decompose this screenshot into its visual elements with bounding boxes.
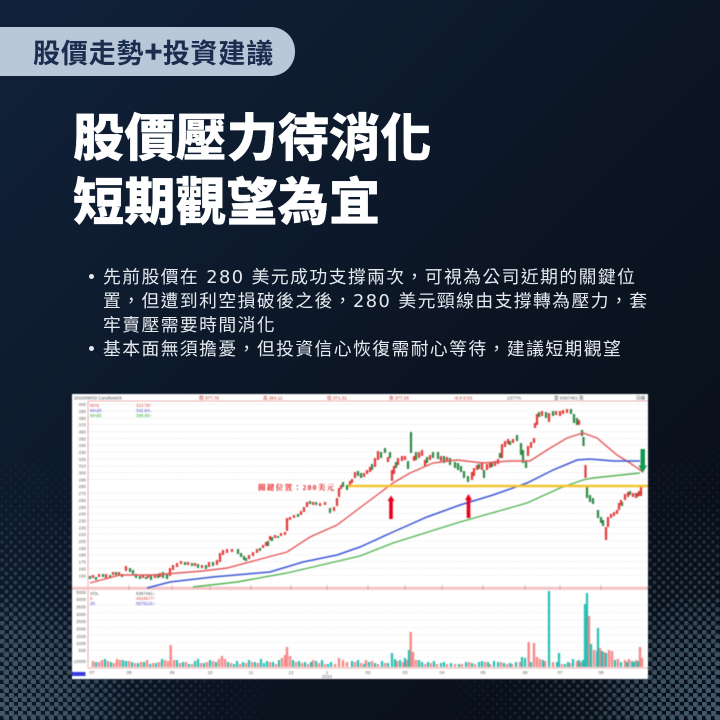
volume bars: teal (96, 591, 638, 667)
price axis labels: 340 (79, 443, 87, 448)
price axis labels: 350 (79, 436, 87, 441)
volume axis labels: 5000 (76, 590, 87, 595)
volume bars: red (93, 616, 642, 667)
time axis labels: 12 (288, 670, 294, 675)
time axis labels: 02 (365, 670, 371, 675)
volume axis labels: 1500 (76, 634, 87, 639)
price axis labels: 220 (79, 525, 87, 530)
MA legend: MA20 (90, 408, 102, 413)
price axis labels: 380 (79, 416, 87, 421)
time axis labels: 11 (249, 670, 254, 675)
blue date tag (72, 672, 86, 676)
bullet text block: 基本面無須擔憂，但投資信心恢復需耐心等待，建議短期觀望 (103, 339, 622, 359)
MA legend (90, 403, 152, 418)
time axis labels: 04 (439, 670, 445, 675)
price axis labels: 180 (79, 553, 87, 558)
category tag: 股價走勢+投資建議: 股價走勢+投資建議 (33, 28, 274, 72)
chart header data row: Candlestick (98, 396, 122, 400)
MA legend: MA60 (90, 413, 102, 418)
price axis labels: 150 (79, 573, 87, 578)
volume axis labels: 1000 (76, 641, 87, 646)
time axis labels: 09 (169, 670, 175, 675)
key level label: 關鍵位置：280美元 (258, 482, 336, 492)
bullet text block (89, 267, 648, 359)
price axis labels: 210 (79, 532, 87, 537)
time axis labels: 03 (402, 670, 408, 675)
volume legend: 6397461↓ (136, 591, 155, 596)
price axis labels: 330 (79, 450, 87, 455)
breakdown arrow (638, 449, 647, 473)
chart header data row: 日線 (636, 394, 646, 402)
price axis labels: 290 (79, 477, 87, 482)
support arrow 2 (465, 494, 472, 518)
volume legend: 5575131↑ (136, 601, 155, 606)
price axis labels: 240 (79, 512, 87, 516)
price axis labels: 250 (79, 505, 87, 510)
chart frame (72, 401, 648, 668)
price axis labels: 190 (79, 546, 87, 551)
chart header data row: 開 377.76 (199, 396, 219, 402)
price axis labels: 270 (79, 491, 87, 496)
volume axis labels: 10000 (74, 659, 87, 664)
time axis labels: 1 (326, 670, 329, 675)
bullet text block: 牢賣壓需要時間消化 (103, 315, 276, 335)
price axis labels: 260 (79, 498, 87, 503)
chart header data row: 1377% (507, 396, 521, 400)
moving average: green line (193, 473, 640, 587)
chart header data row: 量 6397461 張 (554, 394, 584, 402)
time axis labels: 07 (557, 670, 563, 675)
volume axis labels: 2000 (76, 626, 87, 632)
MA legend: 298.85↑ (136, 413, 152, 418)
volume legend: VOL (90, 591, 99, 596)
moving average: red line (90, 433, 643, 583)
price axis labels: 400 (79, 402, 87, 407)
price axis labels: 200 (79, 539, 87, 544)
candlesticks: up days (93, 409, 641, 578)
chart header data row: -8.0 0.03 (454, 396, 473, 400)
panel: stock candlestick chart (72, 394, 648, 679)
price axis labels: 370 (79, 422, 87, 428)
key level line at 280 (348, 485, 648, 487)
time axis labels: 05 (480, 670, 486, 675)
price axis labels: 280 (79, 484, 87, 489)
MA legend: 313.78↑ (136, 403, 152, 408)
volume legend: 20 (90, 601, 95, 606)
time axis labels: 08 (598, 670, 604, 675)
price axis labels: 320 (79, 457, 87, 462)
volume axis labels: 3000 (76, 612, 87, 617)
volume legend: 4626677↑ (136, 596, 155, 601)
title: 短期觀望為宜 (73, 174, 380, 231)
time axis labels (89, 670, 604, 679)
volume axis labels (74, 590, 87, 664)
price axis labels: 310 (79, 464, 87, 469)
price axis labels: 230 (79, 518, 87, 523)
support arrow 1 (388, 496, 394, 519)
title (73, 110, 431, 231)
price axis labels: 170 (79, 560, 87, 564)
title: 股價壓力待消化 (73, 110, 431, 167)
chart header data row: 高 384.11 (263, 394, 283, 402)
volume legend (90, 591, 155, 606)
chart header data row: 低 371.31 (327, 394, 347, 402)
MA legend: MA5 (90, 403, 100, 408)
time axis labels: 07 (89, 670, 95, 675)
volume legend: 5 (90, 596, 93, 601)
price axis labels: 390 (79, 409, 87, 414)
volume axis labels: 3600 (76, 604, 87, 610)
chart header data row (74, 394, 646, 402)
time axis labels: 2024 (322, 674, 333, 679)
volume axis labels: 500 (79, 648, 87, 653)
bullet text block: 置，但遭到利空損破後之後，280 美元頸線由支撐轉為壓力，套 (103, 291, 648, 312)
time axis labels: 06 (522, 670, 528, 675)
MA legend: 342.84↓ (136, 408, 152, 413)
time axis labels: 10 (207, 670, 213, 675)
chart header data row: 收 377.26 (389, 394, 409, 402)
price axis labels: 360 (79, 430, 87, 434)
volume axis labels: 2500 (76, 619, 87, 624)
chart header data row: 2024/08/03 (74, 396, 97, 400)
volume axis labels: 4000 (76, 597, 87, 602)
bullet text block: 先前股價在 280 美元成功支撐兩次，可視為公司近期的關鍵位 (103, 267, 636, 288)
time axis labels: 08 (126, 670, 132, 675)
price axis labels (79, 402, 87, 578)
price axis labels: 160 (79, 566, 87, 572)
price axis labels: 300 (79, 470, 87, 476)
candlesticks: down days (90, 409, 637, 580)
moving average: blue line (147, 459, 640, 588)
